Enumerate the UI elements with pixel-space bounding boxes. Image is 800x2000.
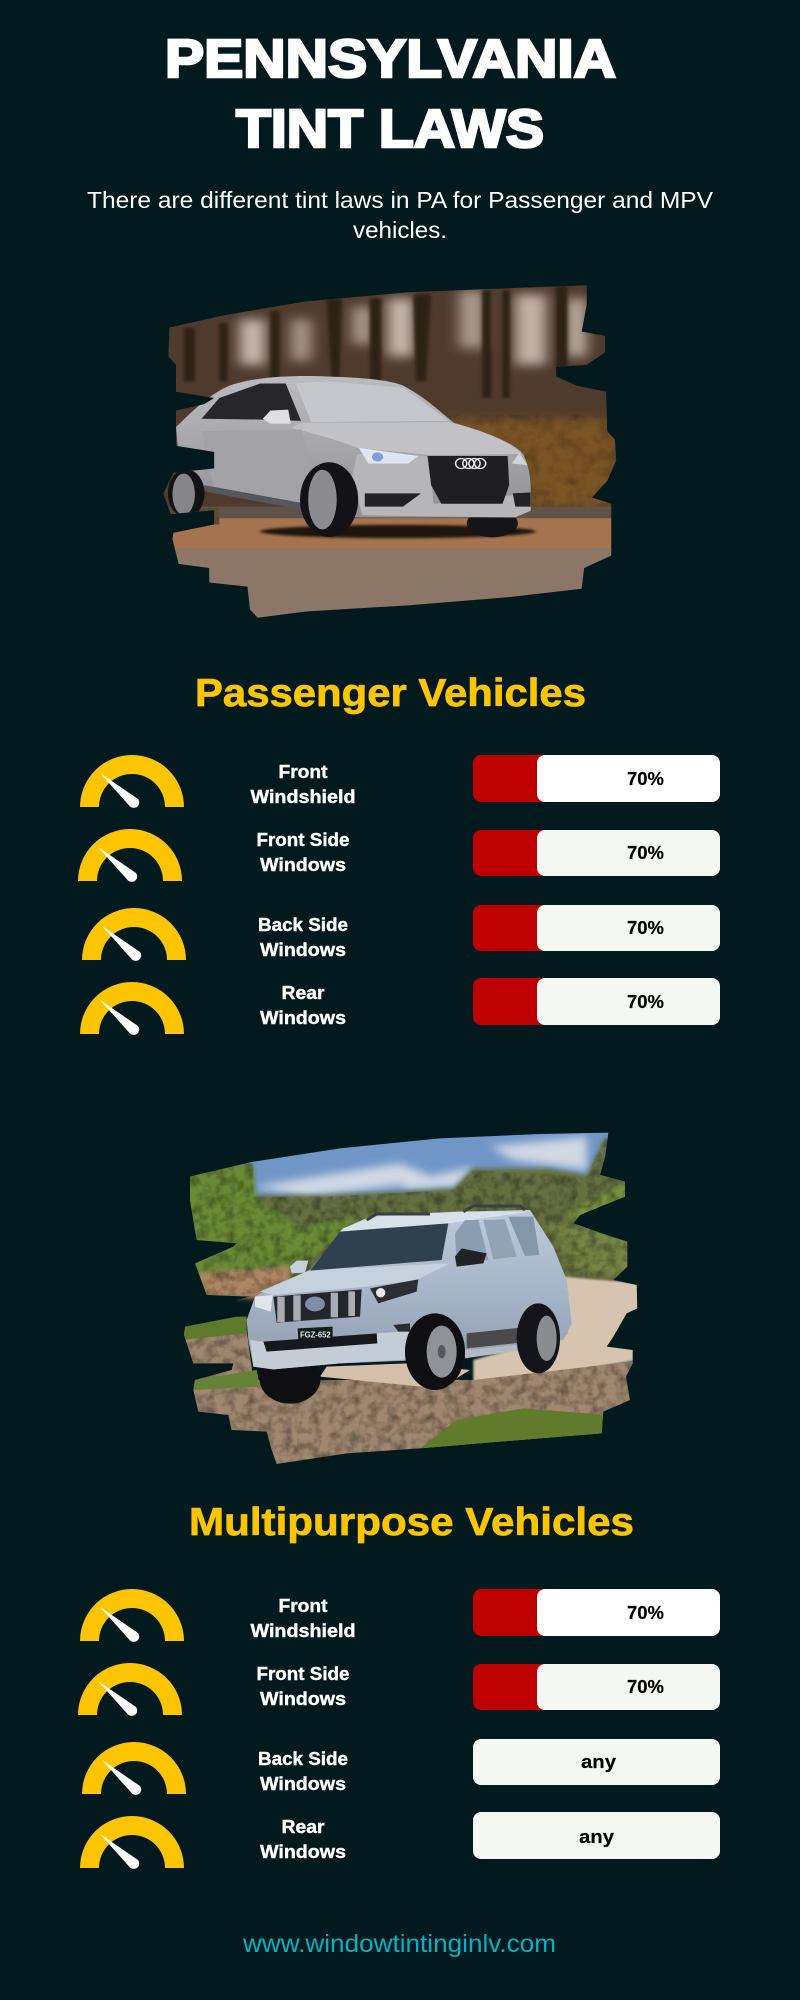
mirror (455, 1248, 487, 1267)
sky (180, 1130, 643, 1230)
title: PENNSYLVANIA (165, 29, 616, 89)
gauge: back side windows (82, 908, 186, 961)
roof (340, 1212, 530, 1232)
title: TINT LAWS (236, 99, 544, 159)
label: front side windows: Windows (260, 1689, 346, 1709)
subtitle (87, 187, 714, 243)
photo: silver SUV in brush stroke (180, 1130, 647, 1467)
bar: front windshield 70% (473, 1589, 720, 1636)
lower bumper (250, 1332, 410, 1370)
photo: silver sedan in brush stroke (153, 282, 628, 623)
gauge: rear windows (80, 1816, 184, 1869)
grille (273, 1289, 362, 1323)
dirt ground (180, 1317, 633, 1467)
front wheel (405, 1313, 465, 1390)
rings (456, 459, 486, 468)
grille (428, 456, 509, 504)
label: front windshield: Front (278, 762, 328, 782)
label: front side windows (256, 1664, 350, 1709)
label: rear windows: Rear (282, 983, 324, 1003)
windscreen (296, 381, 449, 422)
label: back side windows: Back Side (258, 1749, 348, 1769)
label: rear windows (260, 1817, 346, 1862)
subtitle: There are different tint laws in PA for Passenger and MPV (87, 187, 714, 213)
bar: rear windows any (473, 1812, 720, 1859)
number plate: FGZ-652 (300, 1329, 331, 1339)
bar: front side windows 70% (473, 1664, 720, 1710)
bar: rear windows 70% (473, 978, 720, 1025)
bar: back side windows 70% (473, 905, 720, 951)
title (165, 29, 616, 159)
side windows (455, 1217, 539, 1263)
label: front windshield: Windshield (250, 787, 356, 807)
rear wheel (517, 1303, 560, 1373)
far front tyre (466, 517, 518, 538)
label: rear windows: Windows (260, 1842, 346, 1862)
label: rear windows (260, 983, 346, 1028)
label: front side windows: Windows (260, 855, 346, 875)
gauge: front windshield (80, 755, 184, 808)
bar: front windshield 70% (473, 755, 720, 802)
car shadow (260, 525, 536, 538)
gauge: front windshield (80, 1589, 184, 1642)
bar: rear windows any: any (579, 1827, 614, 1847)
website: www.windowtintinginlv.com (242, 1930, 556, 1958)
bar: back side windows 70%: 70% (627, 918, 664, 938)
label: front windshield: Front (278, 1596, 328, 1616)
rear wheel (168, 469, 205, 517)
front-left tyre (259, 1366, 321, 1404)
intakes (365, 493, 421, 507)
headlights (370, 1279, 418, 1303)
label: front windshield: Windshield (250, 1621, 356, 1641)
gauge: back side windows (82, 1742, 186, 1795)
subtitle: vehicles. (353, 217, 447, 243)
bonnet (291, 422, 521, 455)
lower sill (465, 1345, 518, 1358)
label: back side windows (258, 915, 348, 960)
gauge: front side windows (78, 829, 182, 882)
bar: back side windows any: any (581, 1752, 616, 1772)
heading: passenger vehicles: Passenger Vehicles (195, 672, 586, 715)
front bumper (352, 454, 531, 517)
label: front side windows (256, 830, 350, 875)
gauge: rear windows (80, 982, 184, 1035)
dust trail (473, 1277, 640, 1387)
bar: front windshield 70%: 70% (627, 1603, 664, 1623)
door shading (204, 430, 302, 502)
car body (176, 376, 531, 517)
label: front side windows: Front Side (256, 830, 350, 850)
roof rails (367, 1206, 525, 1220)
label: back side windows: Windows (260, 1774, 346, 1794)
bonnet (260, 1263, 450, 1295)
hills and foliage (180, 1137, 647, 1300)
label: front windshield (250, 1596, 356, 1641)
far headlight (512, 453, 528, 465)
bar: back side windows any (473, 1739, 720, 1785)
windscreen (310, 1223, 448, 1271)
label: back side windows: Windows (260, 940, 346, 960)
front wheel (300, 462, 358, 537)
label: rear windows: Windows (260, 1008, 346, 1028)
side windows (202, 384, 301, 421)
label: back side windows (258, 1749, 348, 1794)
label: front windshield (250, 762, 356, 807)
gauge: front side windows (78, 1663, 182, 1716)
SUV body (247, 1210, 572, 1369)
bar: front side windows 70%: 70% (627, 843, 664, 863)
label: back side windows: Back Side (258, 915, 348, 935)
bar: front windshield 70%: 70% (627, 769, 664, 789)
bar: front side windows 70%: 70% (627, 1677, 664, 1697)
label: rear windows: Rear (282, 1817, 324, 1837)
ground (168, 506, 612, 618)
forest background (153, 282, 628, 514)
bar: front side windows 70% (473, 830, 720, 876)
bar: rear windows 70%: 70% (627, 992, 664, 1012)
heading: multipurpose vehicles: Multipurpose Vehicles (189, 1501, 634, 1544)
mirror (263, 410, 291, 424)
headlight (359, 448, 418, 464)
label: front side windows: Front Side (256, 1664, 350, 1684)
